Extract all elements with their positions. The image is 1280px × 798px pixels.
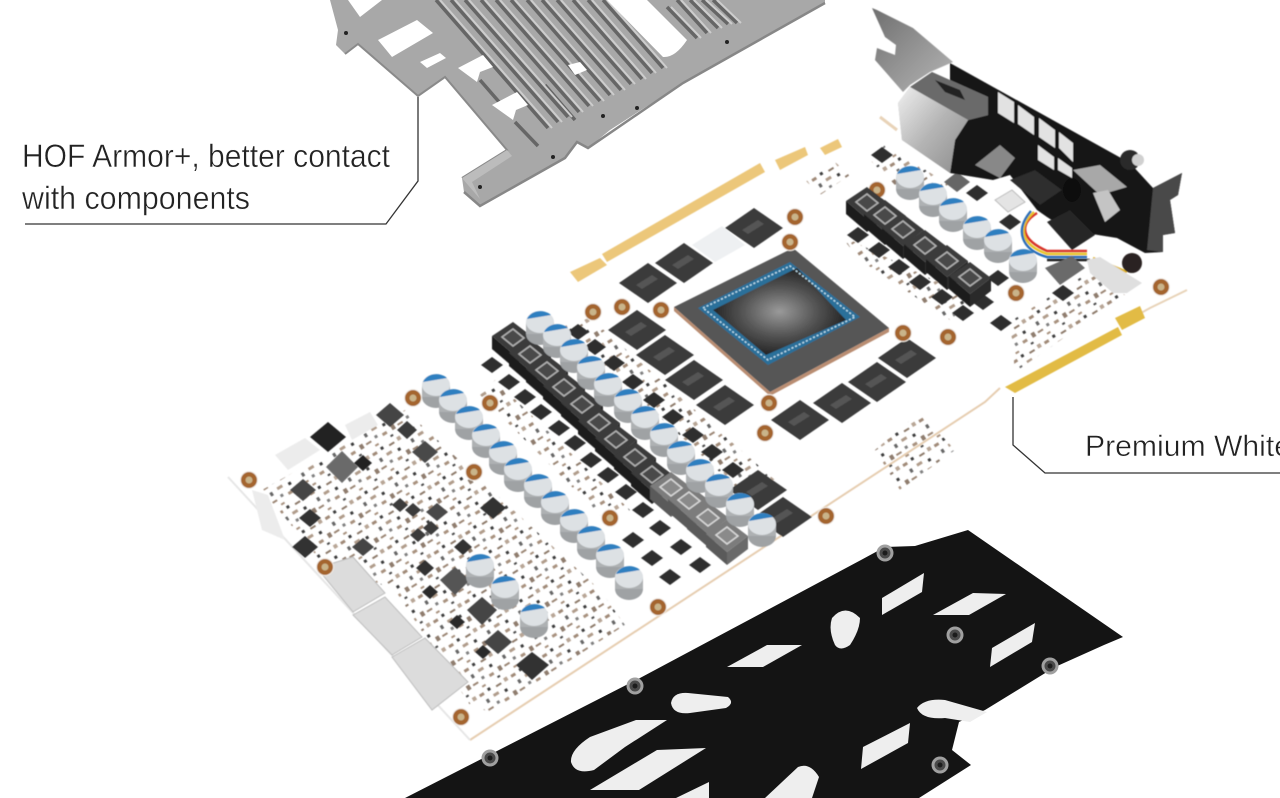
inductors lower row: [492, 322, 748, 565]
caption: HOF Armor+: [21, 138, 390, 216]
leader line: PCB: [1013, 397, 1280, 473]
MOSFET column: [481, 324, 744, 585]
inductors upper row: [846, 187, 1009, 321]
caption: HOF Armor+: HOF Armor+, better contact: [22, 138, 390, 174]
solder component fields: [262, 145, 1125, 712]
bracket windows: [998, 92, 1073, 178]
backplate: [405, 530, 1123, 798]
bracket black body: [950, 63, 1182, 253]
leader line: armor: [25, 97, 418, 224]
left board chips: [290, 403, 549, 680]
mounting holes: [240, 181, 1170, 726]
GPU: [674, 248, 889, 396]
bracket: [872, 8, 1182, 293]
white pad: [692, 226, 745, 262]
screws: [482, 544, 1058, 774]
left edge connectors: [252, 412, 378, 540]
gold fingers bottom: [1005, 306, 1145, 393]
fan wires: [1022, 211, 1127, 275]
capacitors lower rows: [422, 311, 776, 638]
rear knob: [1120, 150, 1140, 170]
bracket plate: [872, 8, 953, 92]
black header: [310, 422, 346, 452]
memory chips: [608, 208, 936, 537]
PCB edges: [228, 117, 1187, 740]
I/O shield: [898, 72, 988, 173]
graphics card board: [228, 8, 1187, 740]
small chips near IO: [871, 147, 1074, 331]
backplate cutouts: [571, 573, 1035, 798]
heatsink: HOF Armor+: [330, 0, 825, 206]
bracket right end: [1147, 173, 1182, 252]
capacitors upper row: [896, 166, 1037, 283]
chrome connectors: [1073, 165, 1127, 195]
fan header: [1087, 257, 1142, 293]
thermal pads: [317, 557, 468, 710]
gold fingers top: [570, 139, 842, 282]
caption: HOF Armor+: with components: [21, 180, 250, 216]
